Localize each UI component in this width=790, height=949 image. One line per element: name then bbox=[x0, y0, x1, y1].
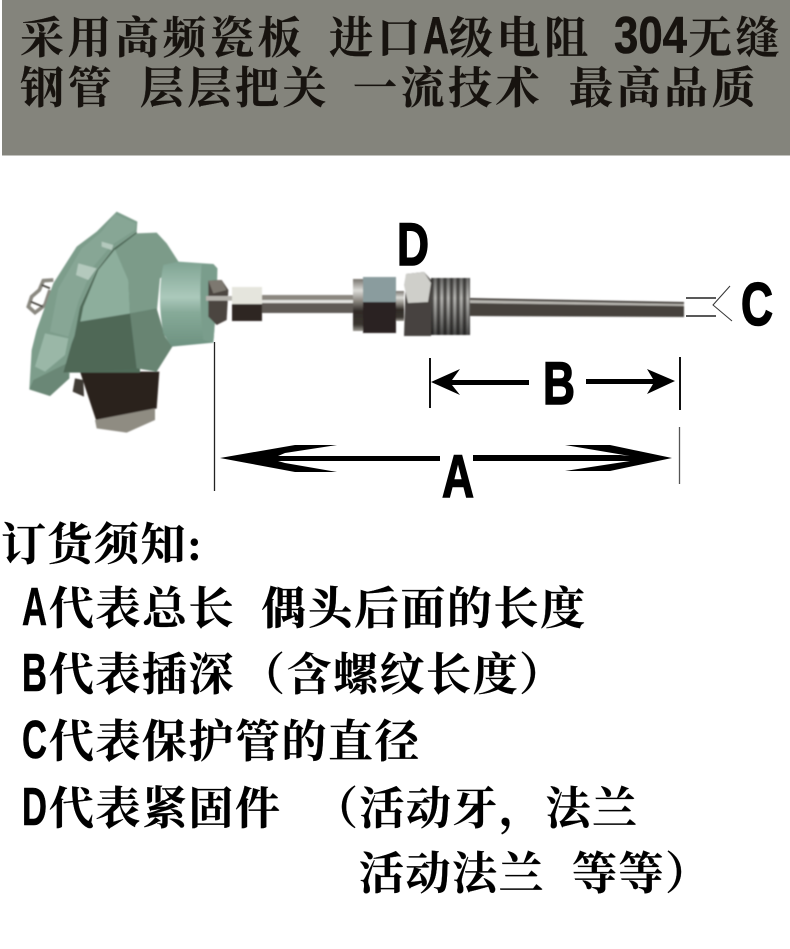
housing lower-right facet bbox=[130, 308, 172, 372]
note D continued: 活动法兰 bbox=[359, 849, 545, 899]
washer bbox=[206, 296, 233, 301]
cover glare bbox=[76, 242, 113, 280]
header line 2 bbox=[20, 64, 759, 113]
left tick bbox=[214, 342, 216, 491]
housing left facet bbox=[80, 249, 130, 323]
right arrow bbox=[586, 369, 675, 394]
sensor product illustration bbox=[28, 212, 684, 433]
right tick bbox=[679, 357, 681, 410]
dimension B bbox=[430, 350, 680, 417]
hex nut bbox=[208, 280, 228, 325]
header line 1: 304 bbox=[614, 7, 687, 65]
left arrow bbox=[431, 369, 529, 395]
header line 1: A bbox=[423, 7, 449, 65]
base nut bbox=[95, 408, 155, 433]
header banner bbox=[2, 0, 790, 156]
letter B: B bbox=[543, 350, 575, 417]
dimension A bbox=[214, 342, 680, 510]
terminal head bbox=[28, 212, 233, 433]
neck bbox=[160, 262, 217, 347]
housing backing bbox=[63, 232, 140, 373]
note B: 代表插深 bbox=[49, 650, 235, 700]
header line 2: 钢管 bbox=[20, 64, 115, 113]
note C: C bbox=[22, 710, 47, 770]
note D: 代表紧固件 bbox=[49, 784, 282, 834]
note C: 代表保护管的直径 bbox=[49, 717, 421, 767]
left tick bbox=[429, 358, 431, 408]
notes heading: 订货须知: bbox=[1, 520, 204, 570]
lock ring bbox=[28, 280, 53, 313]
threaded fitting bbox=[404, 272, 470, 336]
housing upper facet bbox=[115, 233, 180, 313]
note A bbox=[22, 577, 587, 637]
housing lower-left facet bbox=[63, 313, 137, 373]
ordering notes bbox=[1, 520, 712, 899]
ferrule bbox=[232, 287, 262, 321]
header line 2: 最高品质 bbox=[569, 64, 759, 113]
cover bbox=[29, 212, 137, 396]
header line 2: 层层把关 bbox=[140, 64, 330, 113]
compression nut bbox=[353, 277, 404, 333]
letter A: A bbox=[442, 443, 474, 510]
rod bbox=[262, 295, 354, 313]
neck end shade bbox=[200, 264, 217, 343]
cover lower highlight bbox=[35, 333, 68, 372]
left arrow bbox=[220, 445, 440, 472]
note B bbox=[22, 643, 566, 703]
note A: 偶头后面的长度 bbox=[261, 584, 587, 634]
cover shadow bbox=[29, 363, 69, 396]
header line 1: 进口 bbox=[329, 14, 424, 63]
note D: （活动牙，法兰 bbox=[313, 784, 639, 835]
note D bbox=[22, 777, 639, 837]
label C with diameter marks: C bbox=[741, 271, 773, 338]
header line 1: 无缝 bbox=[688, 14, 783, 63]
cover upper highlight bbox=[50, 214, 136, 337]
header line 2: 一流技术 bbox=[353, 64, 543, 113]
note D continued: 等等） bbox=[572, 849, 712, 899]
note A: 代表总长 bbox=[49, 584, 235, 634]
note D: D bbox=[22, 777, 47, 837]
label D: D bbox=[397, 211, 429, 278]
header line 1: 级电阻 bbox=[449, 14, 592, 63]
right arrow bbox=[473, 445, 672, 471]
probe bbox=[470, 298, 684, 317]
note A: A bbox=[22, 577, 47, 637]
note B: B bbox=[22, 643, 47, 703]
header line 1: 采用高频瓷板 bbox=[20, 14, 305, 63]
right tick bbox=[678, 427, 680, 484]
header line 1 bbox=[20, 7, 783, 65]
note B: （含螺纹长度） bbox=[240, 650, 566, 700]
side screw bbox=[73, 378, 84, 397]
label C with diameter marks bbox=[686, 271, 773, 338]
dark base bbox=[80, 372, 159, 420]
